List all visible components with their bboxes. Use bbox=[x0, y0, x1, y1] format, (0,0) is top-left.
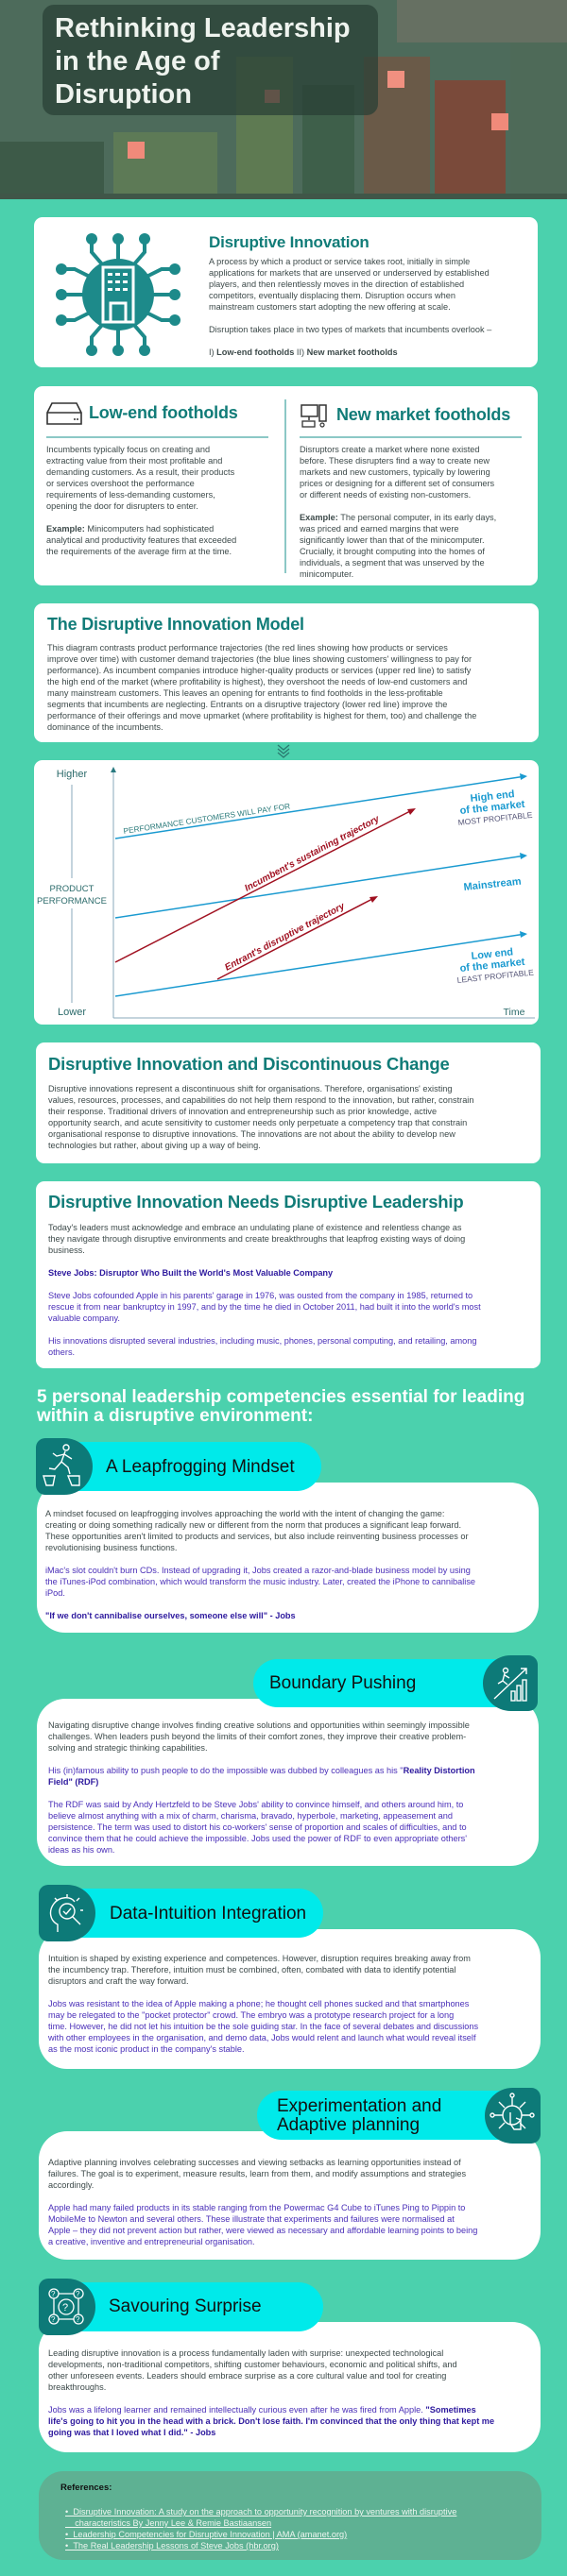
panel: data-intuition: Intuition is shaped by existing experience and competences. However, disruption requires breaking away from bbox=[48, 1954, 471, 1963]
panel: experimentation: Apple – they did not prevent action but rather, were viewed as necessary and affordable learning points to being bbox=[48, 2226, 477, 2235]
tab: savouring surprise: Savouring Surprise bbox=[109, 2296, 262, 2316]
text: low-end bbox=[46, 445, 236, 556]
text block: others. bbox=[48, 1347, 75, 1357]
heading: low-end: Low-end footholds bbox=[89, 403, 238, 422]
tab: experimentation: Adaptive planning bbox=[277, 2115, 420, 2135]
text block: His innovations disrupted several industries, including music, phones, personal computing, and retailing, among bbox=[48, 1336, 477, 1346]
text block: opportunity search, and acute sensitivity to customer needs only perpetuate a competency trap that constrain bbox=[48, 1118, 467, 1127]
tab: boundary pushing: Boundary Pushing bbox=[269, 1673, 416, 1693]
heading: The Disruptive Innovation Model bbox=[47, 615, 304, 634]
tab: data-intuition: Data-Intuition Integration bbox=[110, 1904, 306, 1924]
tab: leapfrogging mindset bbox=[36, 1438, 321, 1495]
chart: disruptive innovation model: of the market bbox=[459, 957, 525, 974]
text block: competitors, eventually displacing them. Disruption occurs when bbox=[209, 291, 455, 300]
panel: data-intuition: with other employees in the organisation, and demo data, Jobs would relent and launch what would reveal itself bbox=[48, 2033, 476, 2042]
panel: data-intuition: time. However, he did not let his intuition be the sole guiding star. In the face of several debates and discussions bbox=[48, 2022, 478, 2031]
panel: disruptive innovation bbox=[34, 217, 538, 367]
icon: leaping runner bbox=[36, 1438, 93, 1495]
title: in the Age of bbox=[55, 46, 220, 76]
panel: boundary pushing: The RDF was said by Andy Hertzfeld to be Steve Jobs' ability to convince himself, and others around him, to bbox=[48, 1800, 463, 1809]
text: new market: was priced and earned margins that were bbox=[300, 524, 459, 534]
icon: server bbox=[46, 402, 82, 425]
panel: savouring surprise bbox=[39, 2322, 541, 2452]
panel: data-intuition: Jobs was resistant to the idea of Apple making a phone; he thought cell phones sucked and that smartphones bbox=[48, 1999, 469, 2008]
title: Rethinking Leadership bbox=[55, 13, 351, 43]
heading: Disruptive Innovation and Discontinuous Change bbox=[48, 1054, 450, 1074]
text block: performance). As incumbent companies introduce higher-quality products or services (upper red line) to satisfy bbox=[47, 666, 471, 675]
chart: disruptive innovation model bbox=[34, 760, 539, 1025]
panel: data-intuition: disruptors and craft the way forward. bbox=[48, 1976, 189, 1986]
text: low-end: extracting value from their most profitable and bbox=[46, 456, 222, 466]
text: new market: minicomputer. bbox=[300, 569, 353, 579]
text: new market: Disruptors create a market where none existed bbox=[300, 445, 479, 454]
icon: question marks network: ? bbox=[76, 2290, 80, 2298]
panel: references: • Disruptive Innovation: A study on the approach to opportunity recognition by ventures with disruptive bbox=[65, 2507, 456, 2517]
text: low-end: requirements of less-demanding customers, bbox=[46, 490, 215, 500]
text: low-end: opening the door for disrupters to enter. bbox=[46, 501, 198, 511]
chart: disruptive innovation model: PRODUCT bbox=[50, 884, 94, 894]
text: new market: Example: The personal computer, in its early days, bbox=[300, 513, 496, 522]
panel: savouring surprise: life's going to hit you in the head with a brick. Don't lose faith. I'm convinced that the only thing that kept me bbox=[48, 2416, 494, 2426]
text block: applications for markets that are unserved or underserved by established bbox=[209, 268, 490, 278]
panel: leapfrogging mindset: "If we don't cannibalise ourselves, someone else will" - Jobs bbox=[45, 1611, 296, 1620]
text: new market: or different needs of existing non-customers. bbox=[300, 490, 471, 500]
panel: references: characteristics By Jenny Lee & Remie Bastiaansen bbox=[75, 2518, 271, 2528]
panel: experimentation: Apple had many failed products in its stable ranging from the Powermac G4 Cube to iTunes Ping to Pippin to bbox=[48, 2203, 465, 2212]
panel: leapfrogging mindset bbox=[37, 1483, 539, 1633]
panel: boundary pushing: persistence. The term was used to distort his co-workers' sense of proportion and scales of difficulties, and to bbox=[48, 1822, 467, 1832]
icon: climbing chart bbox=[483, 1655, 538, 1711]
heading: 5 competencies: 5 personal leadership competencies essential for leading bbox=[37, 1387, 524, 1407]
panel: discontinuous change bbox=[36, 1042, 541, 1163]
panel: experimentation: failures. The goal is to experiment, measure results, learn from them, and modify assumptions and strategies bbox=[48, 2169, 466, 2178]
panel: data-intuition: as the most iconic product in the company's stable. bbox=[48, 2044, 245, 2054]
panel: boundary pushing: believe almost anything with a mix of charm, charisma, bravado, hyperbole, marketing, appeasement and bbox=[48, 1811, 453, 1821]
panel: boundary pushing: convince them that he could achieve the impossible. Jobs used the power of RDF to even appropriate others' bbox=[48, 1834, 467, 1843]
text: low-end: Incumbents typically focus on creating and bbox=[46, 445, 210, 454]
text block: organisational response to disruptive innovations. The innovations are not about the ability to develop new bbox=[48, 1129, 455, 1139]
text block: players, and then relentlessly moves in the direction of established bbox=[209, 280, 464, 289]
text block: mainstream customers start adopting the new offering at scale. bbox=[209, 302, 451, 312]
text block: rescue it from near bankruptcy in 1997, and by the time he died in October 2011, had built it into the world's most bbox=[48, 1302, 481, 1312]
text: low-end: Example: Minicomputers had sophisticated bbox=[46, 524, 214, 534]
text block: Today's leaders must acknowledge and embrace an undulating plane of existence and relentless change as bbox=[48, 1223, 461, 1232]
icon: desktop computer bbox=[301, 404, 327, 428]
chart: disruptive innovation model: LEAST PROFITABLE bbox=[456, 968, 534, 985]
panel: model bbox=[34, 603, 539, 742]
panel: references: • Leadership Competencies for Disruptive Innovation | AMA (amanet.org) bbox=[65, 2530, 347, 2539]
chart: disruptive innovation model: Entrant's disruptive trajectory bbox=[223, 901, 347, 974]
panel: boundary pushing bbox=[37, 1699, 539, 1866]
panel: references bbox=[39, 2471, 541, 2560]
text block: Steve Jobs: Disruptor Who Built the World's Most Valuable Company bbox=[48, 1268, 333, 1278]
text: new market: before. These disrupters find a way to create new bbox=[300, 456, 490, 466]
panel: data-intuition bbox=[39, 1929, 541, 2069]
text block bbox=[209, 257, 491, 357]
chart: disruptive innovation model: High end bbox=[470, 788, 515, 805]
text block: I) Low-end footholds II) New market footholds bbox=[209, 347, 398, 357]
panel: boundary pushing: Field" (RDF) bbox=[48, 1777, 98, 1787]
text: low-end: demanding customers. As a result, their products bbox=[46, 467, 234, 477]
tab: savouring surprise bbox=[39, 2279, 323, 2335]
title: Disruption bbox=[55, 79, 192, 110]
chart: disruptive innovation model: PERFORMANCE bbox=[37, 896, 107, 907]
chart: disruptive innovation model: Incumbent's sustaining trajectory bbox=[243, 814, 382, 894]
panel: boundary pushing: solving and strategic thinking capabilities. bbox=[48, 1743, 208, 1753]
chart: disruptive innovation model: of the market bbox=[459, 799, 525, 817]
tab: experimentation: Experimentation and bbox=[277, 2096, 441, 2116]
text block: segments that incumbents are neglecting. Entrants on a disruptive trajectory (lower red line) improve the bbox=[47, 700, 447, 709]
icon: question marks network: ? bbox=[51, 2315, 56, 2324]
heading: 5 competencies: within a disruptive environment: bbox=[37, 1406, 313, 1426]
text block bbox=[48, 1223, 481, 1357]
text block: This diagram contrasts product performance trajectories (the red lines showing how products or services bbox=[47, 643, 448, 652]
panel: savouring surprise: Leading disruptive innovation is a process fundamentally laden with surprise: unexpected technological bbox=[48, 2348, 443, 2358]
arrow: chevron down bbox=[278, 744, 289, 758]
panel: savouring surprise: developments, non-traditional competitors, shifting customer behaviours, economic and political shifts, and bbox=[48, 2360, 457, 2369]
text block: Steve Jobs cofounded Apple in his parents' garage in 1976, was ousted from the company in 1985, returned to bbox=[48, 1291, 472, 1300]
icon: gear with hand bbox=[485, 2088, 541, 2144]
panel: boundary pushing: challenges. When leaders push beyond the limits of their comfort zones, they improve their creative problem- bbox=[48, 1732, 466, 1741]
panel: leapfrogging mindset: revolutionising business functions. bbox=[45, 1543, 177, 1552]
tab: experimentation bbox=[257, 2088, 541, 2144]
text: low-end: analytical and productivity features that exceeded bbox=[46, 535, 236, 545]
text block: business. bbox=[48, 1246, 85, 1255]
text: new market: Crucially, it brought computing into the homes of bbox=[300, 547, 485, 556]
header image: circuit board city bbox=[0, 0, 567, 199]
icon: question marks network bbox=[39, 2279, 95, 2335]
text block: many mainstream customers. This leaves an opening for entrants to find footholds in the less-profitable bbox=[47, 688, 443, 698]
panel: footholds bbox=[34, 386, 538, 585]
text: new market: significantly lower than that of the minicomputer. bbox=[300, 535, 485, 545]
icon: head with magnifier bbox=[39, 1885, 95, 1941]
panel: experimentation: MobileMe to Newton and several others. These illustrate that experiments and failures were normalised at bbox=[48, 2214, 455, 2224]
icon: question marks network: ? bbox=[76, 2315, 80, 2324]
icon: question marks network: ? bbox=[51, 2290, 56, 2298]
tab: leapfrogging mindset: A Leapfrogging Mindset bbox=[106, 1457, 295, 1477]
text block: Disruptive innovations represent a discontinuous shift for organisations. Therefore, organisations' existing bbox=[48, 1084, 453, 1093]
text block: the high end of the market (where profitability is highest), they overshoot the needs of low-end customers and bbox=[47, 677, 467, 686]
panel: savouring surprise: other unforeseen events. Leaders should embrace surprise as a core cultural value and tool for creating bbox=[48, 2371, 446, 2381]
text: new market: individuals, a segment that was unserved by the bbox=[300, 558, 485, 568]
panel: boundary pushing: Navigating disruptive change involves finding creative solutions and opportunities within seemingly impossible bbox=[48, 1720, 470, 1730]
text block: valuable company. bbox=[48, 1313, 120, 1323]
text block: improve over time) with customer demand trajectories (the blue lines showing customers' willingness to pay for bbox=[47, 654, 472, 664]
heading: new market: New market footholds bbox=[336, 405, 510, 424]
text: low-end: the requirements of the average firm at the time. bbox=[46, 547, 232, 556]
panel: leapfrogging mindset: These opportunities aren't limited to products and services, but also include reinventing business processes or bbox=[45, 1532, 469, 1541]
chart: disruptive innovation model: Higher bbox=[57, 769, 88, 780]
panel: leapfrogging mindset: A mindset focused on leapfrogging involves approaching the world with the intent of changing the game: bbox=[45, 1509, 444, 1518]
panel: references: • The Real Leadership Lessons of Steve Jobs (hbr.org) bbox=[65, 2541, 279, 2551]
icon: building network bbox=[56, 233, 180, 356]
text block: they navigate through disruptive environments and create breakthroughs that leapfrog existing ways of doing bbox=[48, 1234, 465, 1244]
heading: Disruptive Innovation bbox=[209, 233, 369, 251]
panel: data-intuition: the incumbency trap. Therefore, intuition must be combined, often, combated with data to identify potential bbox=[48, 1965, 455, 1974]
text block: their response. Traditional drivers of innovation and entrepreneurship such as prior knowledge, active bbox=[48, 1107, 437, 1116]
text: new market: markets and new customers, typically by lowering bbox=[300, 467, 490, 477]
panel: leapfrogging mindset: iMac's slot couldn't burn CDs. Instead of upgrading it, Jobs created a razor-and-blade business model by using bbox=[45, 1566, 471, 1575]
text block: A process by which a product or service takes root, initially in simple bbox=[209, 257, 470, 266]
text block: values, resources, processes, and capabilities do not help them respond to the innovation, but rather, constrain bbox=[48, 1095, 473, 1105]
chart: disruptive innovation model: Lower bbox=[58, 1007, 86, 1018]
panel: data-intuition: may be relegated to the "pocket protector" crowd. The embryo was a prototype research project for a long bbox=[48, 2010, 454, 2020]
icon: question marks network: ? bbox=[62, 2302, 68, 2313]
text: new market: prices or designing for a different set of consumers bbox=[300, 479, 494, 488]
chart: disruptive innovation model: PERFORMANCE CUSTOMERS WILL PAY FOR bbox=[123, 801, 291, 836]
panel: savouring surprise: breakthroughs. bbox=[48, 2382, 106, 2392]
text block: dominance of the incumbents. bbox=[47, 722, 163, 732]
chart: disruptive innovation model: Low end bbox=[471, 946, 514, 962]
panel: experimentation: a creative, inventive and entrepreneurial organisation. bbox=[48, 2237, 255, 2246]
panel: references: References: bbox=[60, 2483, 112, 2493]
panel: disruptive leadership bbox=[36, 1181, 541, 1368]
text block bbox=[48, 1084, 473, 1150]
text block: technologies but rather, about giving up a way of being. bbox=[48, 1141, 261, 1150]
heading: Disruptive Innovation Needs Disruptive Leadership bbox=[48, 1192, 463, 1212]
text: new market bbox=[300, 445, 496, 579]
text block bbox=[47, 643, 476, 732]
text block: Disruption takes place in two types of markets that incumbents overlook – bbox=[209, 325, 491, 334]
tab: data-intuition bbox=[39, 1885, 323, 1941]
tab: boundary pushing bbox=[253, 1655, 538, 1711]
heading: 5 competencies bbox=[37, 1387, 524, 1426]
panel: leapfrogging mindset: iPod. bbox=[45, 1588, 65, 1598]
chart: disruptive innovation model: Mainstream bbox=[463, 876, 522, 893]
title bbox=[43, 5, 378, 115]
text block: performance of their offerings and move upmarket (where profitability is highest for them, too) and challenge the bbox=[47, 711, 476, 720]
panel: boundary pushing: His (in)famous ability to push people to do the impossible was dubbed by colleagues as his "Reality Distortion bbox=[48, 1766, 475, 1775]
text: low-end: or services overshoot the performance bbox=[46, 479, 195, 488]
panel: savouring surprise: Jobs was a lifelong learner and remained intellectually curious even after he was fired from Apple. "Sometimes bbox=[48, 2405, 476, 2415]
chart: disruptive innovation model: Time bbox=[504, 1007, 525, 1018]
chart: disruptive innovation model: MOST PROFITABLE bbox=[457, 810, 533, 827]
panel: experimentation bbox=[39, 2131, 541, 2260]
panel: experimentation: Adaptive planning involves celebrating successes and viewing setbacks as learning opportunities instead of bbox=[48, 2158, 461, 2167]
panel: boundary pushing: ideas as his own. bbox=[48, 1845, 114, 1855]
panel: experimentation: accordingly. bbox=[48, 2180, 94, 2190]
panel: leapfrogging mindset: creating or doing something radically new or different from the norm that produces a significant leap forward. bbox=[45, 1520, 461, 1530]
panel: leapfrogging mindset: the iTunes-iPod combination, which would transform the music industry. Later, created the iPhone to cannibalise bbox=[45, 1577, 475, 1586]
panel: savouring surprise: going was that I loved what I did." - Jobs bbox=[48, 2428, 215, 2437]
